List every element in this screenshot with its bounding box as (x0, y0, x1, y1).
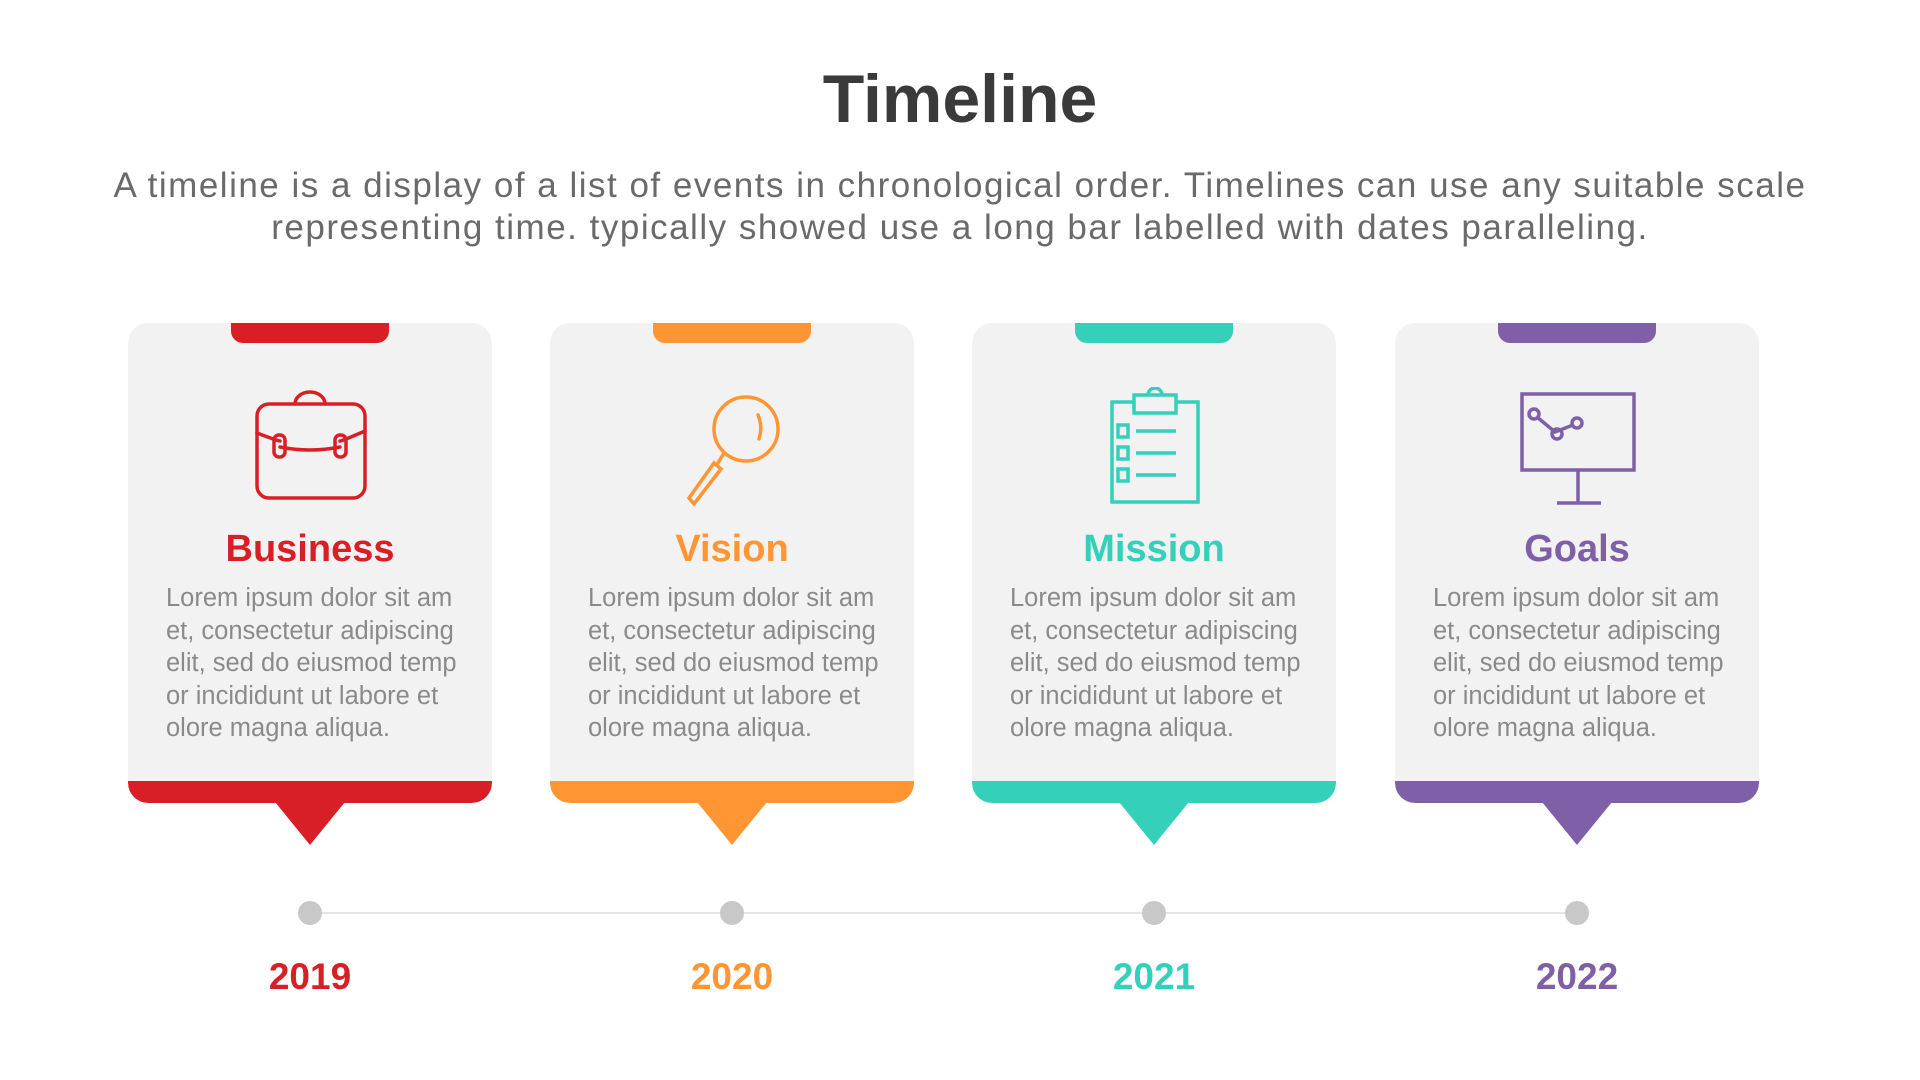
panel: vision (550, 323, 914, 845)
icon: magnifier (686, 395, 780, 507)
text: et, consectetur adipiscing (1433, 616, 1721, 644)
text (588, 584, 879, 742)
text: olore magna aliqua. (1433, 714, 1657, 742)
icon: chart board (1520, 392, 1636, 505)
dot 2019 (298, 901, 322, 925)
icon: clipboard (1110, 387, 1200, 504)
top tab (1498, 323, 1656, 343)
text: or incididunt ut labore et (1433, 682, 1705, 710)
text: Lorem ipsum dolor sit am (1010, 584, 1296, 612)
dot 2022 (1565, 901, 1589, 925)
heading: Goals (1524, 528, 1630, 570)
top tab (653, 323, 811, 343)
subtitle (114, 166, 1806, 247)
text: olore magna aliqua. (166, 714, 390, 742)
subtitle: representing time. typically showed use a long bar labelled with dates paralleling. (271, 208, 1649, 247)
top tab (231, 323, 389, 343)
panel: mission (972, 323, 1336, 845)
text: or incididunt ut labore et (588, 682, 860, 710)
pointer (697, 802, 767, 845)
icon: briefcase (255, 390, 367, 500)
subtitle: A timeline is a display of a list of events in chronological order. Timelines can use any suitable scale (114, 166, 1806, 205)
text: olore magna aliqua. (588, 714, 812, 742)
text (1433, 584, 1724, 742)
pointer (1542, 802, 1612, 845)
text: et, consectetur adipiscing (1010, 616, 1298, 644)
text: et, consectetur adipiscing (166, 616, 454, 644)
text: et, consectetur adipiscing (588, 616, 876, 644)
year 2019: 2019 (269, 956, 351, 997)
text: elit, sed do eiusmod temp (166, 649, 457, 677)
year 2021: 2021 (1113, 956, 1195, 997)
dot 2020 (720, 901, 744, 925)
text: or incididunt ut labore et (1010, 682, 1282, 710)
top tab (1075, 323, 1233, 343)
text: olore magna aliqua. (1010, 714, 1234, 742)
pointer (1119, 802, 1189, 845)
text: Lorem ipsum dolor sit am (166, 584, 452, 612)
title: Timeline (823, 61, 1097, 137)
text: elit, sed do eiusmod temp (1010, 649, 1301, 677)
dot 2021 (1142, 901, 1166, 925)
panel: business (128, 323, 492, 845)
heading: Business (226, 528, 394, 570)
text: Lorem ipsum dolor sit am (1433, 584, 1719, 612)
text (166, 584, 457, 742)
timeline axis (310, 912, 1577, 914)
text: elit, sed do eiusmod temp (588, 649, 879, 677)
year 2020: 2020 (691, 956, 773, 997)
pointer (275, 802, 345, 845)
text: or incididunt ut labore et (166, 682, 438, 710)
heading: Mission (1083, 528, 1225, 570)
heading: Vision (675, 528, 789, 570)
text (1010, 584, 1301, 742)
text: elit, sed do eiusmod temp (1433, 649, 1724, 677)
year 2022: 2022 (1536, 956, 1618, 997)
panel: goals (1395, 323, 1759, 845)
text: Lorem ipsum dolor sit am (588, 584, 874, 612)
